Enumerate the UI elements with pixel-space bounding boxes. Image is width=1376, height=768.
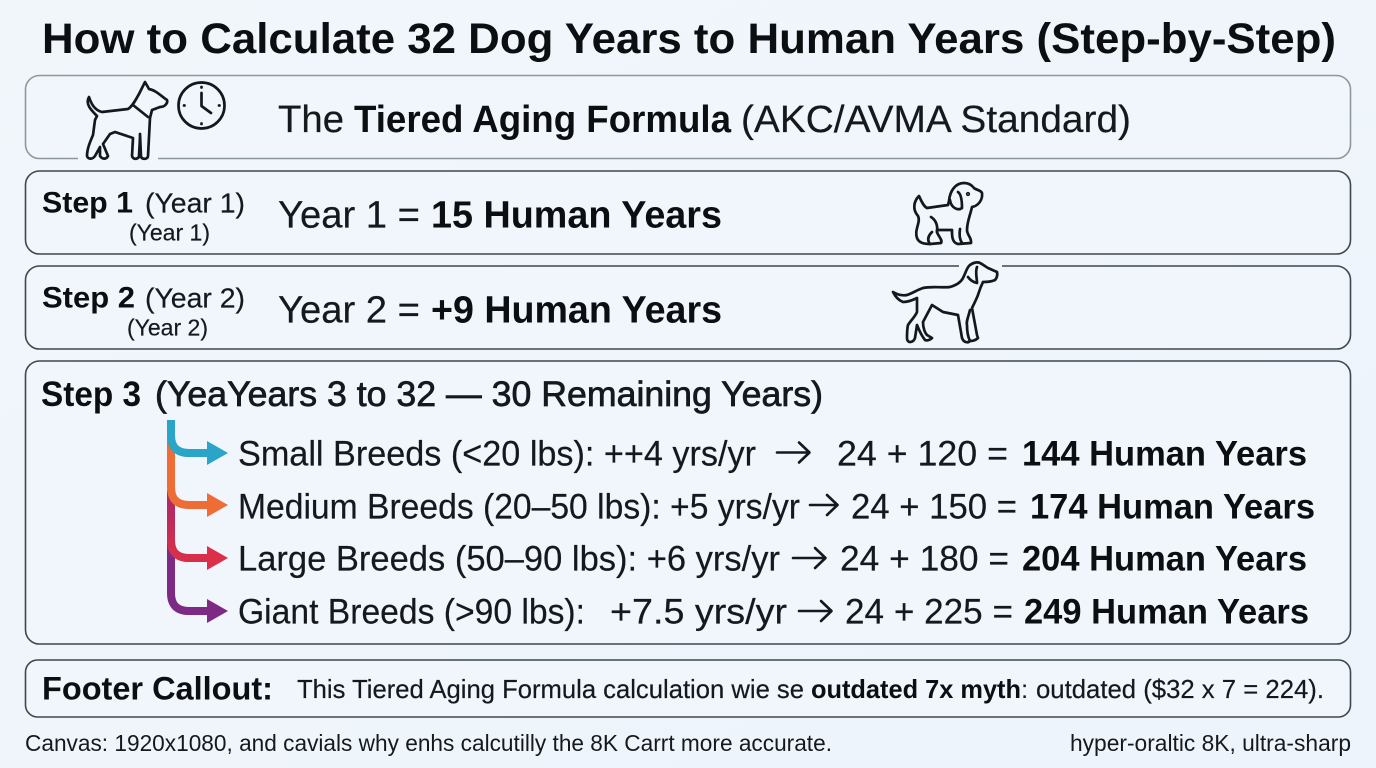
step 1 equation: Year 1 = (278, 194, 420, 236)
row: medium breeds: Medium Breeds (20–50 lbs): +5 yrs/yr (238, 488, 800, 526)
step 2 equation: Year 2 = (278, 290, 420, 332)
row: large breeds: 24 + 180 = (840, 540, 1009, 578)
footer callout label: Footer Callout: (42, 670, 273, 706)
row: giant breeds: 249 Human Years (1024, 592, 1309, 632)
panel: tiered aging formula (26, 76, 1350, 162)
step 1 label: (Year 1) (129, 220, 210, 246)
step 2 label (42, 282, 245, 340)
footer callout text: This Tiered Aging Formula calculation wie se (297, 674, 804, 704)
step 3 heading: (YeaYears 3 to 32 — 30 Remaining Years) (155, 375, 823, 414)
row: giant breeds: 24 + 225 = (845, 592, 1013, 632)
arrow: giant breeds result (799, 601, 832, 621)
row: small breeds: 144 Human Years (1022, 434, 1307, 474)
row: small breeds (238, 434, 1307, 474)
row: small breeds: Small Breeds (<20 lbs): ++4 yrs/yr (238, 434, 756, 474)
step 1 equation: 15 Human Years (431, 194, 722, 236)
step 2 label: Step 2 (42, 282, 135, 314)
arrow: large breeds result (793, 548, 826, 568)
row: medium breeds: 174 Human Years (1030, 488, 1315, 526)
bottom note right: hyper-oraltic 8K, ultra-sharp (1070, 730, 1351, 756)
arrow: small breeds result (777, 442, 810, 462)
footer callout text (297, 674, 1324, 704)
row: medium breeds (238, 488, 1315, 526)
footer callout text: : (1021, 674, 1028, 704)
icon: puppy (914, 183, 982, 244)
row: large breeds (238, 540, 1307, 578)
panel: step 1 (26, 171, 1350, 254)
step 2 label: (Year 2) (145, 282, 245, 314)
formula heading: Tiered Aging Formula (354, 99, 732, 141)
step 3 heading: Step 3 (41, 375, 141, 414)
branching arrows (171, 420, 228, 623)
arrow: giant breeds (171, 540, 228, 623)
row: medium breeds: 24 + 150 = (851, 488, 1017, 526)
arrow: medium breeds result (810, 495, 838, 515)
step 1 label: (Year 1) (145, 188, 245, 218)
row: large breeds: 204 Human Years (1022, 540, 1307, 578)
footer callout text: outdated 7x myth (811, 674, 1021, 704)
step 2 label: (Year 2) (127, 314, 208, 340)
step 1 label: Step 1 (42, 186, 133, 220)
step 1 label (42, 186, 245, 246)
step 1 equation (278, 194, 722, 236)
icon: standing dog (87, 82, 167, 159)
formula heading (278, 99, 1131, 141)
row: giant breeds (238, 592, 1309, 632)
bottom note left: Canvas: 1920x1080, and cavials why enhs calcutilly the 8K Carrt more accurate. (25, 730, 832, 756)
panel: step 2 (26, 262, 1350, 349)
title: How to Calculate 32 Dog Years to Human Years (Step-by-Step) (42, 15, 1336, 63)
formula heading: The (278, 99, 344, 141)
arrow: small breeds (171, 420, 228, 465)
row: small breeds: 24 + 120 = (837, 434, 1008, 474)
panel: footer callout (26, 660, 1350, 717)
panel: step 3 (26, 361, 1350, 644)
step 2 equation (278, 290, 722, 332)
step 2 equation: +9 Human Years (431, 290, 722, 332)
row: large breeds: Large Breeds (50–90 lbs): +6 yrs/yr (238, 540, 780, 578)
icon: adult dog (893, 262, 997, 342)
arrow: medium breeds (171, 436, 228, 517)
row: giant breeds: +7.5 yrs/yr (610, 592, 787, 632)
footer callout text: outdated ($32 x 7 = 224). (1036, 674, 1324, 704)
icon: clock (178, 82, 224, 128)
row: giant breeds: Giant Breeds (>90 lbs): (238, 592, 585, 632)
arrow: large breeds (171, 490, 228, 570)
formula heading: (AKC/AVMA Standard) (741, 99, 1131, 141)
